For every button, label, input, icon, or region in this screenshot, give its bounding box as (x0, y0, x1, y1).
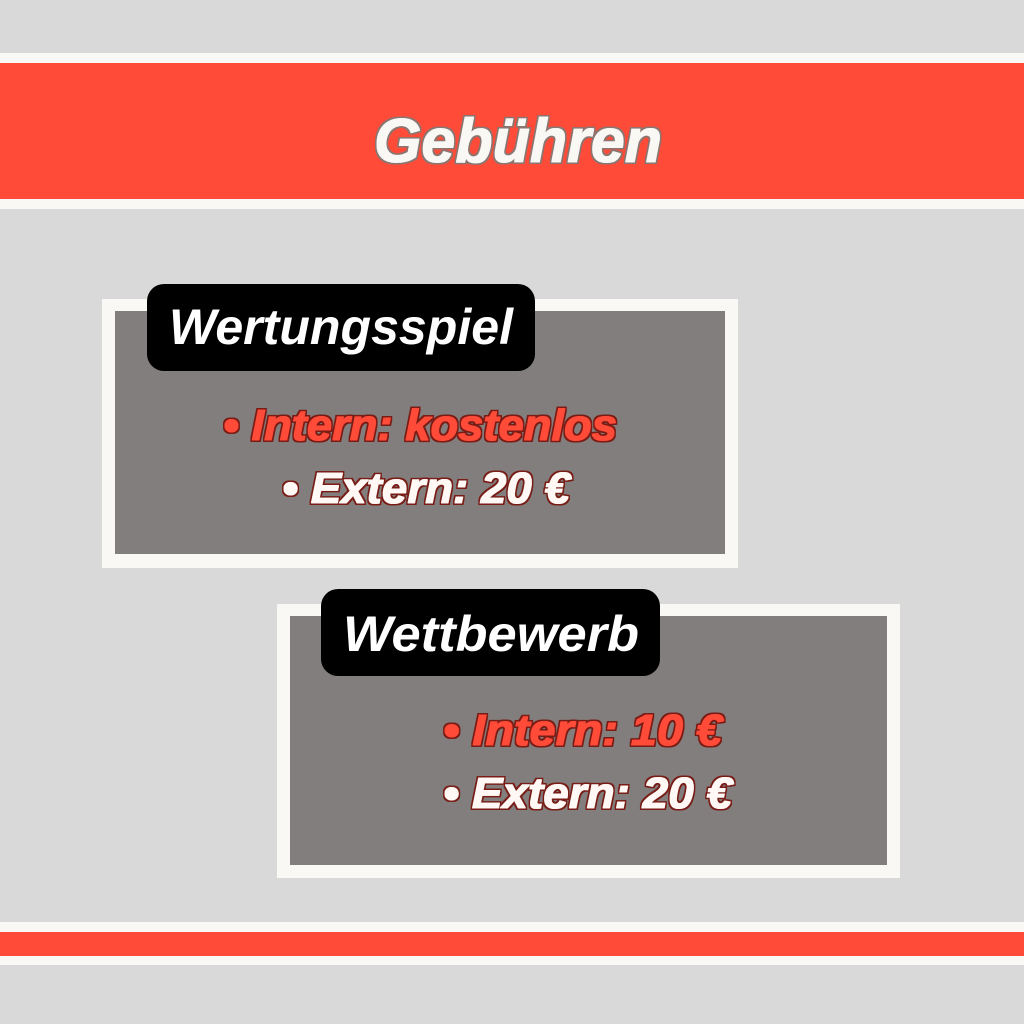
fee list (443, 706, 736, 818)
heading badge: Wertungsspiel (169, 299, 514, 355)
panel: Wertungsspiel (102, 284, 738, 568)
title: Gebühren (374, 107, 662, 176)
fee list: • Extern: 20 € (443, 769, 735, 818)
heading badge (147, 284, 535, 371)
fee list: • Intern: 10 € (443, 706, 725, 755)
panel frame (277, 604, 900, 878)
fee list: • Intern: kostenlos (223, 401, 617, 450)
fee list (223, 401, 618, 513)
bottom band (0, 922, 1024, 965)
fee list: • Extern: 20 € (282, 464, 573, 513)
heading badge: Wettbewerb (343, 606, 639, 662)
panel frame (102, 299, 738, 568)
panel: Wettbewerb (277, 589, 900, 878)
heading badge (321, 589, 660, 676)
top banner (0, 53, 1024, 209)
